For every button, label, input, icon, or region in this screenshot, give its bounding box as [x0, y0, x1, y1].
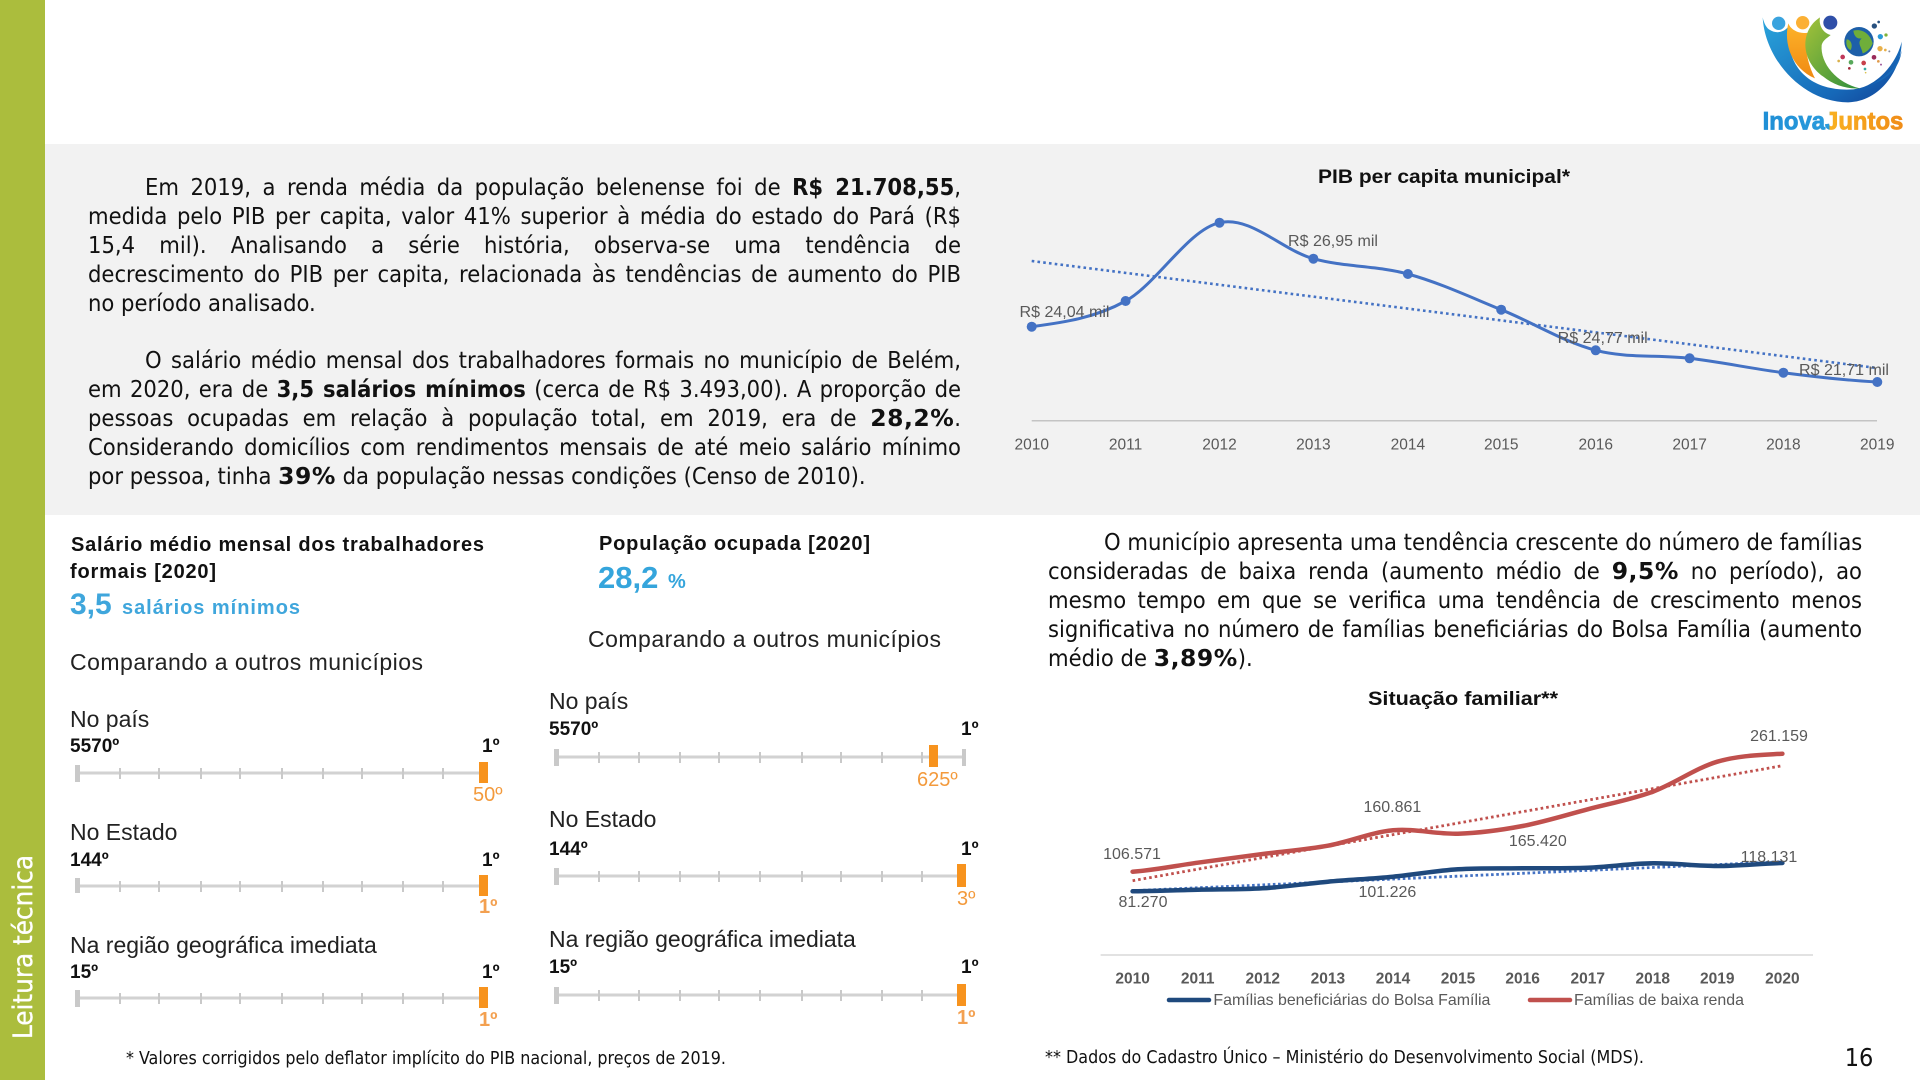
subheading: Comparando a outros municípios	[588, 626, 941, 652]
x axis years: 2019	[1700, 970, 1735, 988]
rank: região geográfica imediata: 1º	[482, 962, 500, 983]
x axis years: 2014	[1391, 436, 1426, 454]
x axis years	[1115, 970, 1800, 988]
data labels: 106.571	[1103, 846, 1161, 863]
text block: baixa renda: significativa no número de famílias beneficiárias do Bolsa Família (aumento	[1048, 614, 1862, 642]
panel: população ocupada	[549, 533, 979, 1029]
data labels: R$ 21,71 mil	[1799, 362, 1889, 379]
data labels: R$ 26,95 mil	[1288, 233, 1378, 250]
sidebar: Leitura técnica	[0, 0, 45, 1080]
data labels: 261.159	[1750, 728, 1808, 745]
value: 28,2 %: %	[668, 571, 686, 593]
heading: População ocupada [2020]	[599, 533, 870, 555]
footnote: cadastro único: ** Dados do Cadastro Único – Ministério do Desenvolvimento Social (MDS).	[1045, 1046, 1644, 1068]
text block: renda média: 15,4 mil). Analisando a série história, observa-se uma tendência de	[88, 231, 961, 259]
rank: no estado	[549, 806, 979, 910]
x axis years: 2015	[1484, 436, 1518, 454]
chart: PIB per capita municipal	[1014, 167, 1895, 454]
rank: no estado: No Estado	[70, 819, 177, 845]
text block: renda média: Em 2019, a renda média da população belenense foi de R$ 21.708,55,	[145, 173, 961, 201]
rank: região geográfica imediata: Na região geográfica imediata	[549, 926, 856, 952]
rank: região geográfica imediata: 1º	[957, 1007, 975, 1029]
text block: renda média: em 2020, era de 3,5 salários mínimos (cerca de R$ 3.493,00). A proporção de	[88, 375, 961, 403]
text block: baixa renda: consideradas de baixa renda (aumento médio de 9,5% no período), ao	[1048, 556, 1862, 584]
sidebar: Leitura técnica: Leitura técnica	[8, 855, 39, 1039]
series: famílias beneficiárias	[1133, 863, 1782, 891]
text block: baixa renda: mesmo tempo em que se verifica uma tendência de crescimento menos	[1048, 586, 1862, 614]
series: famílias de baixa renda	[1133, 754, 1782, 872]
value: 28,2 %	[598, 560, 686, 595]
rank: no país: No país	[70, 706, 149, 732]
rank: no estado: 1º	[482, 850, 500, 871]
x axis years: 2012	[1246, 970, 1280, 988]
data labels: 165.420	[1509, 833, 1567, 850]
chart: Situação familiar	[1100, 689, 1813, 1009]
rank: no estado: 1º	[961, 839, 979, 860]
data labels	[1103, 728, 1808, 911]
footnote: deflator: * Valores corrigidos pelo deflator implícito do PIB nacional, preços de 2019.	[126, 1048, 726, 1069]
rank: região geográfica imediata: 15º	[549, 957, 577, 978]
data labels: 101.226	[1358, 884, 1416, 901]
value: 3,5 salários mínimos: salários mínimos	[122, 597, 300, 619]
data labels: 81.270	[1119, 894, 1168, 911]
heading: formais [2020]	[70, 561, 216, 583]
x axis years: 2013	[1296, 436, 1331, 454]
x axis years: 2019	[1860, 436, 1895, 454]
rank: região geográfica imediata: Na região geográfica imediata	[70, 932, 377, 958]
logo: InovaJuntos	[1762, 16, 1903, 135]
x axis years: 2016	[1505, 970, 1540, 988]
text block: renda média: pessoas ocupadas em relação à população total, em 2019, era de 28,2%.	[88, 404, 961, 432]
data labels: 160.861	[1363, 799, 1421, 816]
x axis years: 2015	[1441, 970, 1476, 988]
heading	[70, 534, 484, 583]
page number: 16	[1845, 1043, 1873, 1072]
rank: no país: 1º	[482, 736, 500, 757]
text block: baixa renda: médio de 3,89%).	[1048, 644, 1253, 672]
x axis years: 2018	[1766, 436, 1801, 454]
subheading: Comparando a outros municípios	[70, 649, 423, 675]
legend	[1169, 992, 1744, 1009]
rank: no estado: 144º	[549, 839, 588, 860]
x axis years: 2013	[1311, 970, 1346, 988]
rank: no país: 1º	[961, 719, 979, 740]
x axis years: 2017	[1570, 970, 1605, 988]
text block: renda média: decrescimento do PIB per capita, relacionada às tendências de aumento do PIB	[88, 260, 961, 288]
rank: região geográfica imediata: 1º	[961, 957, 979, 978]
x axis years: 2011	[1109, 436, 1142, 454]
x axis years: 2018	[1636, 970, 1670, 988]
rank: no país: 5570º	[549, 719, 598, 740]
text block: renda média: medida pelo PIB per capita, valor 41% superior à média do estado do Pará (R$	[88, 202, 961, 230]
rank: no país	[549, 688, 979, 791]
rank: no estado: 3º	[957, 888, 976, 910]
x axis years: 2011	[1181, 970, 1215, 988]
rank: no estado: No Estado	[549, 806, 656, 832]
data labels	[1020, 233, 1889, 379]
text block: renda média: Considerando domicílios com rendimentos mensais de até meio salário mínimo	[88, 433, 961, 461]
chart title: PIB per capita municipal*	[1318, 167, 1571, 188]
text block: baixa renda: O município apresenta uma tendência crescente do número de famílias	[1104, 528, 1862, 556]
data labels: R$ 24,04 mil	[1020, 304, 1110, 321]
text block: renda média: O salário médio mensal dos trabalhadores formais no município de Belém,	[145, 346, 961, 374]
text block: baixa renda	[1048, 528, 1862, 672]
rank: no estado: 1º	[479, 896, 497, 918]
legend: Famílias beneficiárias do Bolsa Família	[1213, 992, 1490, 1009]
data labels: 118.131	[1741, 849, 1797, 866]
value: 28,2 %: 28,2	[598, 560, 658, 595]
x axis years: 2020	[1765, 970, 1800, 988]
logo: InovaJuntos: InovaJuntos	[1763, 107, 1903, 135]
x axis years: 2017	[1672, 436, 1707, 454]
x axis years	[1014, 436, 1895, 454]
x axis years: 2012	[1202, 436, 1237, 454]
x axis years: 2010	[1014, 436, 1049, 454]
rank: no país: No país	[549, 688, 628, 714]
panel: grey background	[45, 144, 1920, 515]
rank: região geográfica imediata: 15º	[70, 962, 98, 983]
rank: região geográfica imediata	[549, 926, 979, 1029]
rank: no país: 5570º	[70, 736, 119, 757]
rank: no país: 625º	[917, 769, 958, 791]
rank: no estado	[70, 819, 500, 918]
x axis years: 2016	[1578, 436, 1613, 454]
text block: renda média	[88, 173, 961, 490]
text block: renda média: no período analisado.	[88, 289, 316, 317]
rank: no país: 50º	[473, 784, 503, 806]
heading: Salário médio mensal dos trabalhadores	[71, 534, 484, 556]
text block: renda média: por pessoa, tinha 39% da população nessas condições (Censo de 2010).	[88, 462, 866, 490]
rank: região geográfica imediata	[70, 932, 500, 1031]
value: 3,5 salários mínimos: 3,5	[70, 588, 112, 621]
data labels: R$ 24,77 mil	[1558, 330, 1648, 347]
rank: região geográfica imediata: 1º	[479, 1009, 497, 1031]
rank: no estado: 144º	[70, 850, 109, 871]
x axis years: 2010	[1115, 970, 1150, 988]
legend: Famílias de baixa renda	[1574, 992, 1744, 1009]
panel: salário médio mensal	[70, 534, 503, 1031]
x axis years: 2014	[1376, 970, 1411, 988]
value: 3,5 salários mínimos	[70, 588, 300, 621]
rank: no país	[70, 706, 503, 806]
chart title: Situação familiar**	[1368, 689, 1559, 710]
